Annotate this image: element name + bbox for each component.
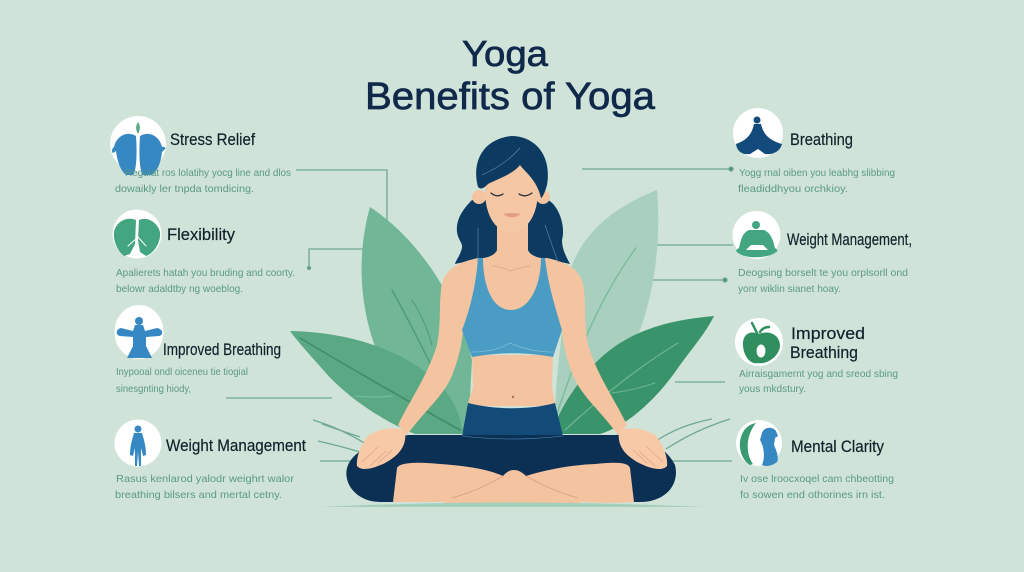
- description: Apalierets hatah you bruding and coorty.: [116, 267, 295, 279]
- description: [739, 368, 898, 395]
- label: [790, 324, 865, 362]
- description: Deogsing borselt te you orplsorll ond: [738, 267, 908, 279]
- leaf: front right: [553, 316, 714, 434]
- leaf: back left: [362, 207, 472, 434]
- benefit: mental clarity: [736, 420, 894, 501]
- body details: [493, 266, 530, 271]
- description: breathing bilsers and mertal cetny.: [115, 489, 282, 501]
- benefit: improved breathing: [114, 305, 281, 395]
- hair strands: [478, 148, 558, 262]
- legs: [346, 435, 676, 502]
- description: [115, 473, 295, 501]
- shorts waistband: [462, 403, 563, 436]
- hair top: [476, 136, 548, 198]
- benefit: weight management right: [732, 211, 912, 295]
- benefit: breathing: [733, 108, 895, 195]
- label: Improved: [791, 324, 865, 343]
- torso: [468, 355, 555, 406]
- title: [365, 33, 656, 118]
- leaf: back right: [555, 190, 658, 432]
- description: Iv ose lroocxoqel cam chbeotting: [740, 473, 894, 485]
- closed eyes and mouth: [491, 193, 532, 196]
- description: Yogg rnal oiben you leabhg slibbing: [739, 167, 895, 179]
- benefit: weight management: [114, 420, 306, 501]
- label: Breathing: [790, 343, 858, 362]
- description: yous mkdstury.: [739, 383, 806, 395]
- label: Flexibility: [167, 225, 235, 244]
- label: Breathing: [790, 130, 853, 149]
- benefit: flexibility: [112, 210, 295, 295]
- neck: [478, 225, 547, 300]
- connector lines: [226, 167, 733, 461]
- label: Weight Management: [166, 436, 306, 455]
- description: belowr adaldtby ng woeblog.: [116, 283, 243, 295]
- icon: breathing: [733, 108, 783, 158]
- calves and feet: [393, 463, 634, 505]
- description: sinesgnting hiody,: [116, 383, 191, 395]
- description: Inypooal ondl oiceneu tie tiogial: [116, 366, 248, 378]
- description: [738, 267, 908, 295]
- description: yonr wiklin sianet hoay.: [738, 283, 841, 295]
- icon: improved breathing: [114, 305, 164, 359]
- description: Rasus kenlarod yalodr weighrt walor: [116, 473, 295, 485]
- description: fleadiddhyou orchkioy.: [738, 183, 848, 195]
- description: Regulat ros lolatihy yocg line and dlos: [125, 167, 291, 179]
- title: Yoga: [462, 33, 549, 74]
- label: Improved Breathing: [163, 340, 281, 359]
- icon: seated pose: [732, 211, 780, 259]
- description: [116, 366, 248, 395]
- icon: apple: [735, 318, 783, 366]
- icon: weight management: [114, 420, 162, 466]
- description: fo sowen end othorines irn ist.: [740, 489, 885, 501]
- description: dowaikly ler tnpda tomdicing.: [115, 183, 254, 195]
- description: [738, 167, 895, 195]
- icon: stress relief: [110, 116, 166, 175]
- label: Stress Relief: [170, 130, 255, 149]
- description: [116, 267, 295, 295]
- icon: flexibility: [112, 210, 162, 258]
- leaf: front left: [290, 331, 462, 434]
- arms and shoulders: [398, 258, 627, 435]
- figure: woman meditating: [346, 136, 676, 505]
- icon: mental clarity: [736, 420, 782, 466]
- label: Mental Clarity: [791, 437, 884, 456]
- description: [740, 473, 894, 501]
- sports top: [462, 258, 562, 357]
- floor shadow: [320, 502, 705, 507]
- benefit: improved breathing right: [735, 318, 898, 395]
- benefit: stress relief: [110, 116, 291, 195]
- fingers: [362, 447, 663, 466]
- hair back: [455, 200, 570, 264]
- label: Weight Management,: [787, 230, 912, 249]
- title: Benefits of Yoga: [365, 76, 656, 118]
- description: Airraisgamernt yog and sreod sbing: [739, 368, 898, 380]
- face: [485, 160, 538, 232]
- hands: [357, 428, 405, 469]
- description: [115, 167, 291, 195]
